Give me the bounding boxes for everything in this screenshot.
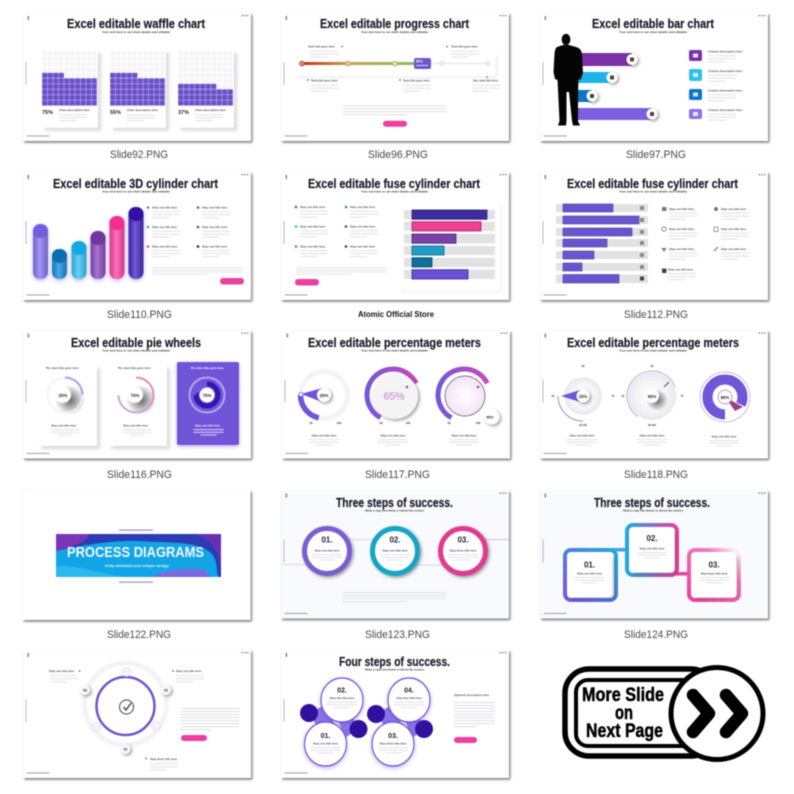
step labels [147,206,230,257]
slide: three steps squares [540,490,768,618]
step 01: 01. [321,536,333,544]
meter 1: needle 25%: 25% [319,393,329,398]
meter 3: dial with badge: Step one title here [451,434,477,438]
subtitle: Write a step one theme or about the section [365,668,424,672]
slide: waffle chart [23,13,251,141]
meter 3: dial with badge: 65% [486,416,494,420]
icon step labels: Step one title here [721,227,746,231]
legend item 3 [689,88,742,101]
progress track [293,52,495,76]
subtitle: Your text here to set chart details and editable [361,30,429,34]
meter 1: needle 25%: Step one title here [311,434,337,438]
panel: pie 75% highlighted: Pie chart title goes here [191,366,224,370]
panel: pie 75% highlighted [177,362,239,445]
task label: bottom right [472,76,500,92]
meter 2: dial 65%: Step one title here [380,434,406,438]
step 02: 02. [337,688,347,694]
task label: top right [446,44,479,58]
meter 3: dial with badge [438,369,500,446]
panel: waffle 75%: Chart description here [59,108,90,112]
slide: progress chart [281,13,509,141]
meter 1: scale 25%: 25% [579,394,587,399]
badge outer frame [565,669,715,756]
slide: three steps circles [281,490,509,618]
meter 2: scale 65% [617,361,687,446]
panel: waffle 75% [42,50,98,128]
badge text: Next Page [586,721,663,742]
bar 2 [578,72,618,83]
caption: Slide116: Slide116.PNG [107,469,172,481]
bar 1 [578,53,638,66]
banner subtitle: Fully animated and unique design [105,564,169,568]
step 04 [388,678,430,722]
label: top left: Step one title here [49,669,74,673]
cylinder 2 [52,249,67,279]
task label: bottom left [307,78,339,92]
legend item 2: Column description here [708,69,742,73]
legend item 2 [689,69,742,82]
bar 4 [575,108,658,120]
connector 1 to 2 [612,548,627,552]
panel: pie 25%: Pie chart title goes here [46,366,79,370]
slide: 3D cylinder chart [23,172,251,300]
label: bottom [145,757,178,770]
caption: Slide92: Slide92.PNG [110,149,168,161]
step labels: Step one title here [300,205,325,209]
icon step labels: Step one title here [668,268,693,272]
meter 1: scale 25%: Step one title here [569,434,595,438]
paragraph [343,592,446,602]
step labels: Step one title here [350,224,375,228]
step 03 [440,528,486,574]
panel: pie 75%: 75% [130,393,140,398]
subtitle: Your text here to set chart details and editable [102,30,171,34]
step 01: 01. [321,733,330,740]
bar 3 [576,90,598,102]
meter 3: thick arc 86%: 86% [721,395,729,400]
paragraph [296,267,387,275]
meter 3: thick arc 86%: Step one title here [711,434,737,438]
title: Four steps of success. [339,654,450,669]
paragraph [152,267,243,275]
title: Three steps of success. [336,495,453,510]
step 01 box [565,550,616,600]
panel: waffle 37%: Chart description here [195,108,226,112]
panel: waffle 75%: 75% [42,110,53,116]
button [220,278,244,284]
step 04: Step four title here [396,696,422,700]
panel: pie 75%: Pie chart title goes here [118,366,151,370]
subtitle: Your text here to set chart details and editable [361,348,429,352]
title: Three steps of success. [594,495,710,510]
meter 3: dial with badge: 00 [447,421,451,425]
meter 2: scale 65%: 25 [622,395,625,398]
step labels: Step one title here [300,244,325,248]
node badges: 01 [124,748,127,752]
step labels: Step one title here [152,244,177,248]
task label: top left [308,44,343,58]
icon step labels [662,207,749,280]
panel: waffle 37%: 37% [178,110,189,116]
step 03 box: 03. [708,560,720,570]
meter 2: scale 65%: 75 [681,395,684,398]
subtitle: Write a step one theme or about the section [623,508,683,512]
icon step labels: Step one title here [669,227,694,231]
step labels: Step one title here [300,224,325,228]
panel: pie 75% [108,365,167,446]
panel: waffle 55%: Chart description here [127,108,158,112]
caption: Slide96: Slide96.PNG [368,149,428,161]
step 01 [304,722,346,766]
title: Excel editable pie wheels [71,335,201,350]
banner title: PROCESS DIAGRAMS [67,544,204,561]
connectors [281,539,509,566]
subtitle: Your text here to set chart details and editable [619,190,688,194]
bottom rule [119,582,153,583]
step labels: Step one title here [152,225,177,229]
caption: Slide123: Slide123.PNG [365,629,430,641]
meter 2: dial 65%: 100 [406,421,411,425]
step 03: 03. [388,733,398,740]
step 03: 03. [457,536,469,544]
panel: pie 25%: 25% [58,393,68,398]
task label: bottom middle [399,78,431,92]
slide: pie wheels [23,330,251,458]
progress track: 60% [416,60,423,64]
title: Excel editable waffle chart [67,16,206,31]
task label: bottom middle: Task title goes here [403,78,430,82]
step labels [295,205,378,257]
meter 2: scale 65%: 00 100 [648,424,656,427]
meter 1: scale 25%: 00 100 [579,424,587,427]
subtitle: Your text here to set chart details and editable [619,30,688,34]
step 01: Step one title here [313,742,338,746]
step 03 box: Step three title here [700,572,728,576]
step 02 box [627,525,677,575]
node badges: 02 [164,688,168,692]
main ring [96,677,154,735]
button [181,735,207,741]
meter 2: dial 65%: 65% [383,390,405,402]
icon: double chevron [693,695,742,732]
side heading: Optional description here [454,693,489,697]
step 02: 02. [389,536,401,544]
subtitle: Your text here to set chart details and editable [102,190,171,194]
slide: bar chart with person [540,13,768,141]
caption: Slide110: Slide110.PNG [107,309,172,321]
badge text: on [615,703,633,724]
caption: store name: Atomic Official Store [358,309,434,319]
panel: pie 25% [38,365,97,446]
paragraph [181,708,240,730]
step 02 [321,678,363,722]
icon step labels: Step one title here [721,247,746,251]
legend item 4 [689,108,742,121]
step 03: Step three title here [450,548,477,552]
badge circle [671,668,763,760]
banner [56,534,221,577]
panel: pie 75% highlighted: Step one title here [195,424,220,428]
node badges: 03 [83,688,87,692]
meter 1: scale 25% [552,365,615,446]
subtitle: Your text here to set chart details and editable [619,348,688,352]
meter 2: dial 65% [367,369,418,446]
meter 2: dial 65%: 00 [379,421,383,425]
step labels: Step one title here [152,206,177,210]
title: Excel editable fuse cylinder chart [567,176,739,191]
meter 1: scale 25%: 50 [582,365,585,368]
cylinder 3 [72,241,86,279]
meter 1: scale 25%: 25 [552,395,555,398]
icon step labels: Step one title here [669,247,694,251]
icon: check mark [120,700,134,714]
step labels: Step one title here [202,225,227,229]
task label: top right: Task title goes here [451,44,478,48]
chart panel: fuse bars [398,200,500,290]
step 03 [372,722,414,766]
title: Excel editable bar chart [592,16,715,31]
step 03: Step three title here [380,742,407,746]
task label: bottom right: Has step title here [473,78,498,82]
meter 3: dial with badge: 100 [476,421,481,425]
caption: Slide124: Slide124.PNG [624,629,688,641]
connecting blobs [309,705,424,738]
title: Excel editable progress chart [320,16,470,31]
caption: Slide122: Slide122.PNG [107,629,171,641]
caption: Slide118: Slide118.PNG [624,469,688,481]
task label: top left: Task title goes here [308,44,335,48]
meter 2: scale 65%: 50 [651,365,654,368]
legend item 3: Column description here [708,88,742,92]
button [295,279,319,286]
slide: percentage meters [282,330,510,458]
label: bottom: Step three title here [150,757,177,761]
label: top right: Step one title here [176,669,201,673]
button [383,121,407,127]
meter 3: thick arc 86% [700,372,750,447]
icon step labels: Step one title here [669,207,694,211]
cylinder 1 [33,224,48,279]
title: Excel editable fuse cylinder chart [308,176,481,191]
meter 2: scale 65%: 65% [648,394,656,399]
subtitle: Your text here to set chart details and editable [361,190,429,194]
panel: pie 75% highlighted: 75% [202,393,212,398]
chart: purple fuse bars [556,204,648,283]
step 02 box: 02. [646,534,658,543]
subtitle: Your text here to set chart details and editable [102,348,171,352]
step 04: 04. [404,688,414,694]
paragraph [343,105,447,115]
node badges [80,668,171,754]
step 03 box [689,550,739,600]
meter 2: scale 65%: Step one title here [639,434,665,438]
outer ring [84,663,166,745]
panel: waffle 55%: 55% [110,110,121,116]
icon step labels: Step one title here [721,207,746,211]
label: top left [49,669,80,682]
button [454,737,477,743]
task label: bottom left: Task title goes here [311,78,338,82]
cylinder 6 [128,207,144,279]
cylinder 4 [90,231,106,279]
caption: Slide112: Slide112.PNG [624,309,688,321]
title: Excel editable percentage meters [567,335,739,350]
node dots [300,704,433,738]
step 02 box: Step one title here [639,546,665,550]
title: Excel editable 3D cylinder chart [53,176,219,191]
step 01: Step one title here [314,548,340,552]
step 01 box: 01. [584,560,595,570]
step 01 [304,528,350,574]
panel: waffle 55% [110,50,166,128]
slide: fuse cylinder chart [281,172,509,300]
meter 1: needle 25%: 100 [337,421,342,425]
badge inner frame [576,680,706,746]
meter 1: needle 25%: 00 [309,421,313,425]
badge: more slide on next page [565,668,763,760]
panel: pie 25%: Step one title here [51,424,76,428]
legend item 1: Column description here [708,50,742,54]
caption: Slide117: Slide117.PNG [365,469,430,481]
step 01 box: Step one title here [577,572,602,576]
label: top right [172,669,204,682]
connector 2 to 3 [672,572,690,576]
legend item 1 [689,50,742,62]
slide: fuse cylinder chart with icons [540,172,768,300]
step 02 [372,528,418,574]
step 02: Step one title here [382,548,408,552]
side paragraph [454,702,495,727]
step labels: Step one title here [202,244,227,248]
caption: Slide97: Slide97.PNG [626,149,686,161]
legend item 4: Column description here [708,108,742,112]
top rule [119,530,153,531]
slide: percentage meters with scales [540,330,768,458]
badge text: More Slide [582,685,664,706]
cylinder 5 [110,216,124,279]
panel: waffle 37% [178,50,234,128]
step labels: Step one title here [202,206,227,210]
slide: four steps [281,650,509,778]
title: Excel editable percentage meters [308,335,481,350]
step labels: Step one title here [350,205,375,209]
step labels: Step one title here [350,244,375,248]
person silhouette [554,34,583,126]
subtitle: Write a step one theme or about the section [365,508,424,512]
meter 1: scale 25%: 75 [612,395,615,398]
slide: circular process [23,650,251,778]
step 02: Step two title here [330,696,355,700]
slide: process diagrams divider [22,490,250,620]
panel: pie 75%: Step one title here [123,424,148,428]
meter 1: needle 25% [296,367,352,446]
